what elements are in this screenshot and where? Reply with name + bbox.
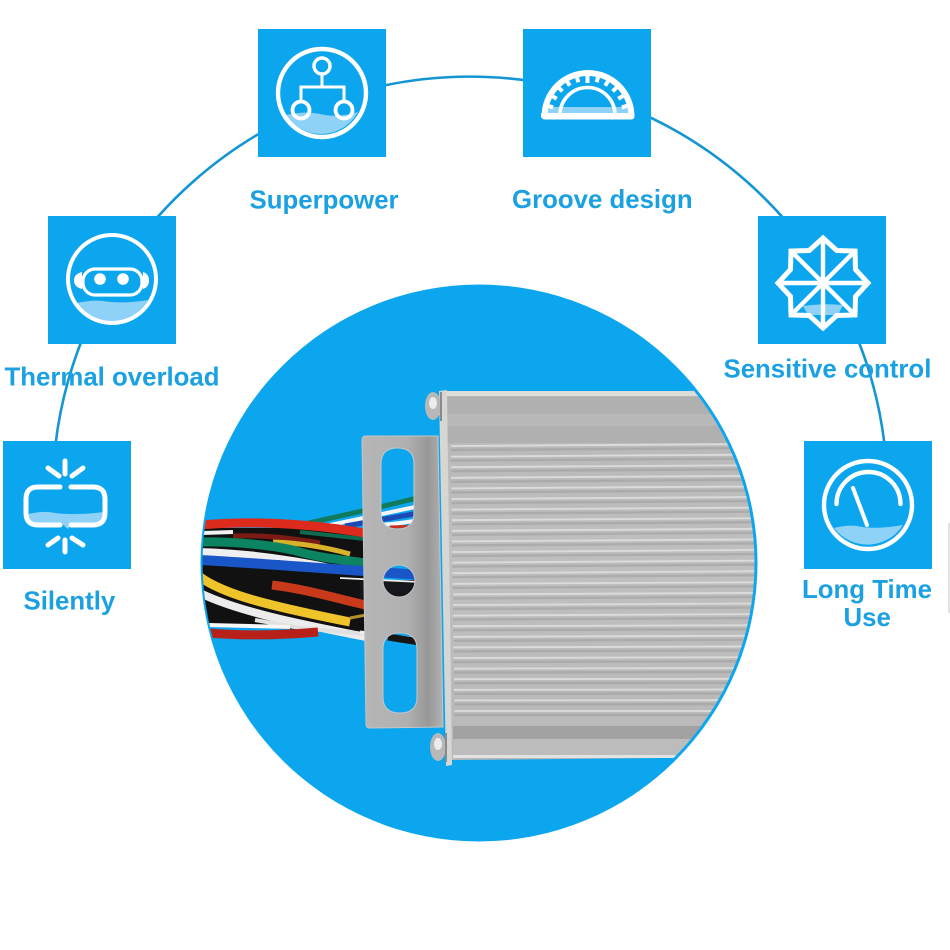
icon tile: groove design — [523, 29, 651, 157]
label: long time use: Long Time — [802, 576, 932, 604]
label: long time use: Use — [844, 604, 891, 632]
bottom bolt — [430, 733, 447, 762]
mounting bracket — [362, 436, 443, 728]
housing end strip — [439, 390, 452, 766]
label: silently: Silently — [24, 588, 116, 616]
dark core of bundle — [200, 528, 366, 636]
label: sensitive control: Sensitive control — [724, 356, 931, 384]
wire bundle — [200, 496, 425, 642]
lower band — [453, 726, 701, 739]
icon tile: silently — [3, 441, 131, 569]
top rim — [447, 391, 698, 396]
label: superpower: Superpower — [250, 186, 399, 214]
top bolt — [425, 392, 442, 421]
label: thermal overload: Thermal overload — [4, 364, 220, 392]
controller body — [439, 390, 773, 766]
icon tile: superpower — [258, 29, 386, 157]
dark wires behind centre hole — [360, 580, 420, 600]
aluminium housing — [445, 391, 770, 760]
label: groove design: Groove design — [512, 186, 693, 214]
cooling ribs — [451, 444, 760, 715]
edge artefact — [948, 523, 950, 613]
icon tile: sensitive control — [758, 216, 886, 344]
icon tile: long time use — [804, 441, 932, 569]
icon tile: thermal overload — [48, 216, 176, 344]
label: long time use — [802, 576, 932, 632]
connecting arc — [55, 77, 885, 445]
upper band — [448, 397, 727, 443]
central blue disc — [200, 284, 758, 842]
